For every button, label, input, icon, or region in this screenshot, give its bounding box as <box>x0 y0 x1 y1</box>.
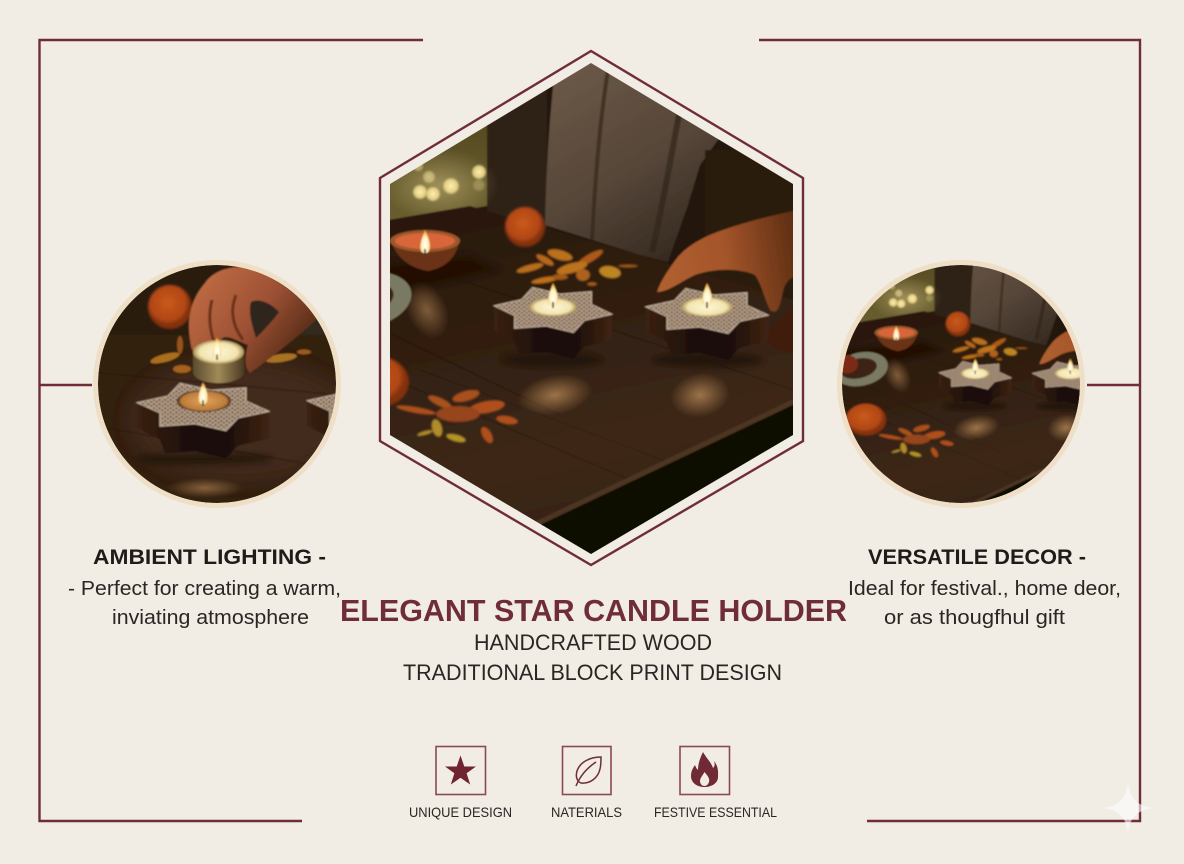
photo: candle holders scene, wider view <box>842 265 1080 503</box>
icon: sparkle watermark <box>1104 783 1152 833</box>
panel: right circular photo <box>837 260 1085 508</box>
text block: ambient lighting <box>68 546 341 629</box>
photo: candle holders on wooden table <box>390 63 793 554</box>
text block: versatile decor <box>848 546 1121 629</box>
icon: star <box>436 746 486 794</box>
description: versatile decor <box>848 577 1121 629</box>
circle ring <box>96 262 338 506</box>
description: ambient lighting: - Perfect for creating a warm, <box>68 577 341 600</box>
title: ELEGANT STAR CANDLE HOLDER <box>340 593 847 628</box>
hexagon border <box>380 51 803 565</box>
feature: materials <box>551 746 622 820</box>
label: unique design: UNIQUE DESIGN <box>409 804 512 820</box>
heading: versatile decor: VERSATILE DECOR - <box>868 546 1086 569</box>
description: ambient lighting: inviating atmosphere <box>112 606 309 629</box>
feature: unique design <box>409 746 512 820</box>
label: festive essential: FESTIVE ESSENTIAL <box>654 804 777 820</box>
icon: flame <box>680 746 730 794</box>
heading: ambient lighting: AMBIENT LIGHTING - <box>93 546 326 569</box>
subtitle: TRADITIONAL BLOCK PRINT DESIGN <box>403 660 782 685</box>
feature: festive essential <box>654 746 777 820</box>
description: versatile decor: or as thougfhul gift <box>884 606 1065 629</box>
subtitle: HANDCRAFTED WOOD <box>474 630 712 655</box>
description: ambient lighting <box>68 577 341 629</box>
circle ring <box>840 262 1082 506</box>
label: materials: NATERIALS <box>551 804 622 820</box>
icon: leaf <box>562 746 611 794</box>
title block <box>340 593 847 685</box>
feature row <box>409 746 777 820</box>
subtitle <box>403 630 782 685</box>
panel: left circular photo <box>93 260 341 508</box>
panel: central hexagon photo <box>378 50 804 566</box>
description: versatile decor: Ideal for festival., home deor, <box>848 577 1121 600</box>
photo: hand placing tealight <box>98 265 336 503</box>
